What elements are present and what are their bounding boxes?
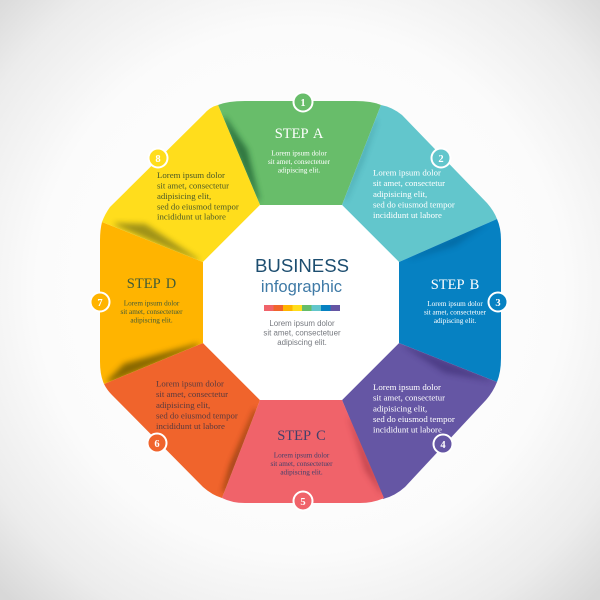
step C text: Lorem ipsum dolor (274, 452, 330, 460)
segment 2: teal (342, 105, 497, 262)
number badge 4: 4 (440, 440, 446, 451)
step C text: STEP C (277, 428, 326, 444)
step B text: STEP B (431, 277, 479, 293)
segment 5: red (222, 400, 384, 503)
step D text: Lorem ipsum dolor (124, 300, 180, 308)
number badge 5 (294, 492, 312, 510)
step D text: STEP D (127, 276, 176, 292)
text block 2: sit amet, consectetur (373, 178, 445, 188)
center hub (203, 205, 399, 400)
text block 6: adipisicing elit, (156, 400, 210, 410)
number badge 5: 5 (300, 497, 306, 508)
number badge 1 (294, 92, 312, 112)
number badge 1: 1 (300, 98, 306, 109)
number badge 2 (432, 148, 450, 168)
step A text (268, 126, 331, 174)
number badge 8: 8 (155, 154, 161, 165)
text block 8: Lorem ipsum dolor (157, 170, 225, 180)
step B text: adipiscing elit. (434, 317, 476, 325)
number badge 2: 2 (438, 154, 444, 165)
text block 8: adipisicing elit, (157, 191, 211, 201)
number badge 3 (488, 292, 508, 312)
text block 4: sed do eiusmod tempor (373, 414, 455, 424)
step B text: sit amet, consectetuer (424, 308, 487, 316)
step C text: adipiscing elit. (280, 468, 323, 476)
step B text (424, 277, 487, 325)
center octagon (203, 205, 399, 400)
step D text (120, 276, 183, 324)
colour bar (264, 305, 340, 311)
subheading: infographic: infographic (261, 277, 342, 296)
number badge 7: 7 (97, 298, 103, 309)
text block 6: sit amet, consectetur (156, 389, 228, 399)
center text: Lorem ipsum dolor (269, 319, 335, 328)
step C text (270, 428, 333, 476)
center text: adipiscing elit. (277, 338, 327, 347)
step A text: sit amet, consectetuer (268, 158, 331, 166)
segment 6: orange (104, 343, 260, 498)
text block 8: incididunt ut labore (157, 212, 226, 222)
text block 6: incididunt ut labore (156, 421, 225, 431)
number badge 3: 3 (495, 298, 501, 309)
text block 2: incididunt ut labore (373, 210, 442, 220)
text block 4: incididunt ut labore (373, 424, 442, 434)
heading: BUSINESS: BUSINESS (255, 255, 349, 276)
ring of eight segments (100, 101, 501, 503)
step C text: sit amet, consectetuer (270, 460, 333, 468)
center text: sit amet, consectetuer (263, 329, 341, 338)
number badge 4 (434, 434, 452, 454)
segment 8: yellow (102, 105, 260, 262)
text block 8: sed do eiusmod tempor (157, 201, 239, 211)
segment 1: green (218, 101, 381, 205)
step A text: STEP A (275, 126, 324, 142)
step D text: sit amet, consectetuer (120, 308, 183, 316)
text block 2: adipisicing elit, (373, 189, 427, 199)
number badge 8 (148, 148, 168, 168)
step A text: Lorem ipsum dolor (271, 150, 327, 158)
segment 3: blue (399, 219, 501, 382)
segment 4: purple (342, 343, 497, 499)
text block 8: sit amet, consectetur (157, 180, 229, 190)
text block 2: Lorem ipsum dolor (373, 168, 441, 178)
text block 4: adipisicing elit, (373, 403, 427, 413)
text block 6: sed do eiusmod tempor (156, 410, 238, 420)
text block 6: Lorem ipsum dolor (156, 378, 224, 388)
number badge 7 (90, 292, 110, 312)
text block 2: sed do eiusmod tempor (373, 199, 455, 209)
text block 4: sit amet, consectetur (373, 393, 445, 403)
number badge 6: 6 (154, 439, 160, 450)
segment 7: amber (100, 222, 203, 384)
step D text: adipiscing elit. (130, 316, 173, 324)
step B text: Lorem ipsum dolor (427, 300, 483, 308)
number badge 6 (148, 434, 166, 452)
text block 4: Lorem ipsum dolor (373, 382, 441, 392)
step A text: adipiscing elit. (278, 166, 320, 174)
